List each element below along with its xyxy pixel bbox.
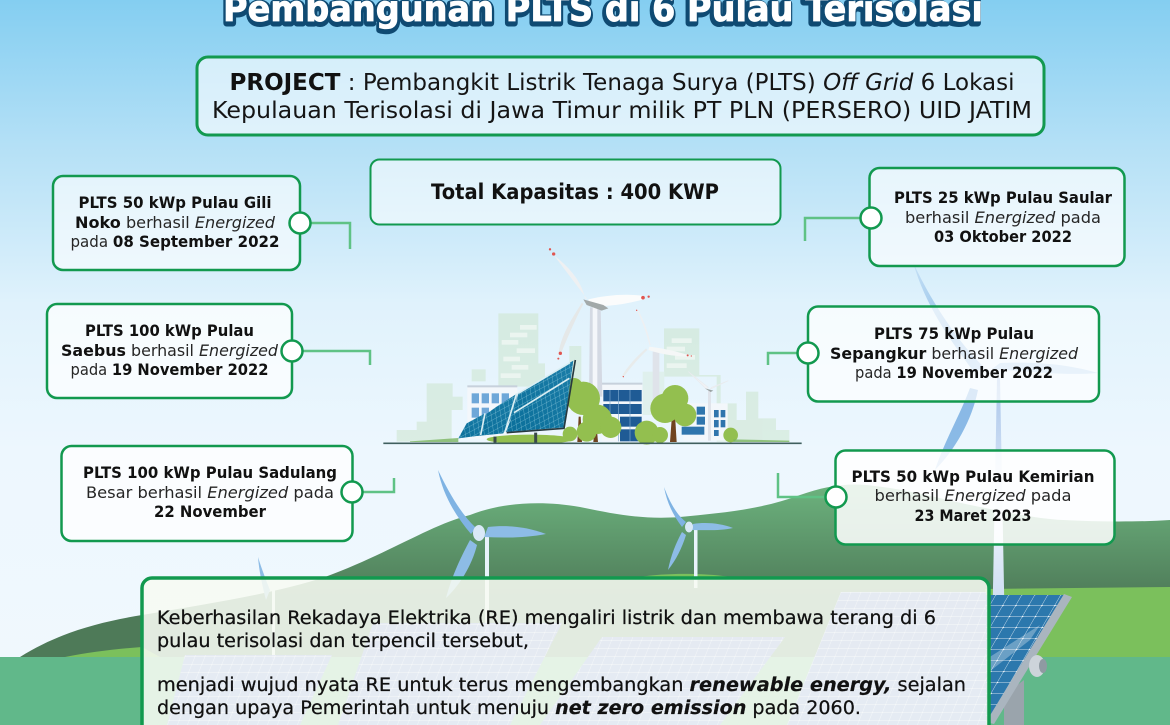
callout: Gili Noko: pada 08 September 2022 — [70, 232, 280, 251]
callout: Kemirian — [826, 450, 1114, 544]
callout: Gili Noko — [53, 176, 310, 270]
trees — [487, 378, 738, 445]
callout: Saular: PLTS 25 kWp Pulau Saular — [894, 188, 1112, 207]
callout: Saebus: PLTS 100 kWp Pulau — [85, 321, 254, 340]
blue building centre — [602, 383, 642, 441]
callout: Kemirian: PLTS 50 kWp Pulau Kemirian — [852, 467, 1094, 486]
white building right — [682, 403, 728, 441]
statement text — [157, 608, 966, 719]
solar array — [458, 360, 575, 443]
callout: Kemirian: 23 Maret 2023 — [914, 506, 1032, 525]
total capacity box — [370, 160, 780, 224]
callout: Sepangkur: Sepangkur berhasil Energized — [830, 344, 1079, 363]
connector lines — [302, 218, 860, 497]
white building left — [467, 385, 517, 439]
wind turbine: small left — [258, 557, 275, 660]
project box — [197, 57, 1044, 135]
statement text: pulau terisolasi dan terpencil tersebut, — [157, 631, 529, 652]
total capacity box: Total Kapasitas : 400 KWP — [431, 180, 719, 204]
callout: Sepangkur: PLTS 75 kWp Pulau — [874, 324, 1034, 343]
callout: Sadulang Besar: 22 November — [154, 502, 266, 521]
callout: Sadulang Besar: Besar berhasil Energized pada — [86, 483, 334, 502]
statement text: Keberhasilan Rekadaya Elektrika (RE) mengaliri listrik dan membawa terang di 6 — [157, 608, 936, 629]
callout: Sepangkur: pada 19 November 2022 — [855, 363, 1053, 382]
central illustration: solar, wind, city — [383, 248, 802, 445]
project box: Kepulauan Terisolasi di Jawa Timur milik PT PLN (PERSERO) UID JATIM — [212, 96, 1032, 124]
wind turbine: large right background — [913, 262, 1098, 640]
project box: PROJECT : Pembangkit Listrik Tenaga Surya (PLTS) Off Grid 6 Lokasi — [230, 68, 1014, 96]
callout: Saebus — [47, 304, 302, 398]
callout: Saebus: Saebus berhasil Energized — [61, 341, 279, 360]
callout: Saular: 03 Oktober 2022 — [934, 227, 1072, 246]
faded city — [397, 313, 789, 442]
callout: Sadulang Besar: PLTS 100 kWp Pulau Sadulang — [83, 463, 337, 482]
callout: Saular — [860, 168, 1124, 266]
faded solar panels — [167, 592, 986, 725]
turbine small — [688, 372, 728, 441]
bottom statement panel — [142, 578, 989, 725]
callout: Sadulang Besar — [62, 446, 362, 541]
callout: Gili Noko: Noko berhasil Energized — [75, 213, 276, 232]
callout: Kemirian: berhasil Energized pada — [874, 486, 1072, 505]
solar panel foreground right — [985, 594, 1072, 725]
callout: Saular: berhasil Energized pada — [905, 208, 1101, 227]
callout: Gili Noko: PLTS 50 kWp Pulau Gili — [78, 193, 272, 212]
ground line — [383, 441, 802, 446]
wind turbine: left hill — [438, 470, 546, 645]
turbine middle — [622, 309, 692, 402]
landscape hills — [0, 484, 1170, 725]
statement text: menjadi wujud nyata RE untuk terus mengembangkan renewable energy, sejalan — [157, 675, 966, 696]
callout: Sepangkur — [798, 306, 1099, 402]
statement text: dengan upaya Pemerintah untuk menuju net zero emission pada 2060. — [157, 698, 861, 719]
wind turbine: middle hill — [664, 487, 733, 588]
callout: Saebus: pada 19 November 2022 — [70, 360, 268, 379]
turbine big — [549, 248, 650, 397]
white windows on faded towers — [501, 325, 695, 378]
